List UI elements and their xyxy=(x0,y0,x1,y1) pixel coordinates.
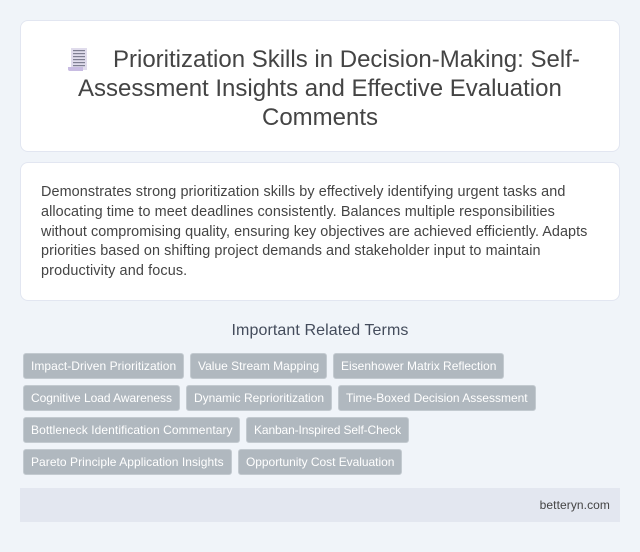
tag list xyxy=(23,353,536,475)
tag xyxy=(338,385,536,411)
tag: Time-Boxed Decision Assessment xyxy=(346,391,528,405)
text block: description: priorities based on shifting project demands and stakeholder input to maintain xyxy=(41,243,541,259)
footer text: betteryn.com xyxy=(540,498,610,512)
panel: description xyxy=(20,162,620,301)
text block: description: without compromising quality, ensuring key objectives are achieved efficiently. Adapts xyxy=(41,224,587,240)
tag: Bottleneck Identification Commentary xyxy=(31,423,233,437)
text block: description xyxy=(41,184,587,279)
title: Prioritization Skills in Decision-Making: Self- xyxy=(113,46,580,73)
tag: Value Stream Mapping xyxy=(198,359,319,373)
tag: Pareto Principle Application Insights xyxy=(31,455,224,469)
tag xyxy=(246,417,409,443)
text block: description: allocating time to meet deadlines consistently. Balances multiple responsibilities xyxy=(41,204,555,220)
text block: description: productivity and focus. xyxy=(41,263,187,279)
title: Comments xyxy=(262,104,378,131)
title: Assessment Insights and Effective Evaluation xyxy=(78,75,562,102)
tag xyxy=(23,417,240,443)
text block: description: Demonstrates strong prioritization skills by effectively identifying urgent tasks and xyxy=(41,184,565,200)
panel: header xyxy=(20,20,620,152)
heading: related terms: Important Related Terms xyxy=(232,322,408,339)
tag: Dynamic Reprioritization xyxy=(194,391,324,405)
tag xyxy=(333,353,504,379)
tag: Kanban-Inspired Self-Check xyxy=(254,423,401,437)
tag xyxy=(23,449,232,475)
tag xyxy=(190,353,327,379)
footer bar xyxy=(20,488,620,522)
tag xyxy=(238,449,402,475)
tag: Cognitive Load Awareness xyxy=(31,391,172,405)
tag xyxy=(23,385,180,411)
tag: Impact-Driven Prioritization xyxy=(31,359,176,373)
tag: Opportunity Cost Evaluation xyxy=(246,455,394,469)
title xyxy=(78,46,580,131)
tag xyxy=(186,385,332,411)
icon: scroll document xyxy=(68,48,87,71)
tag: Eisenhower Matrix Reflection xyxy=(341,359,496,373)
tag xyxy=(23,353,184,379)
